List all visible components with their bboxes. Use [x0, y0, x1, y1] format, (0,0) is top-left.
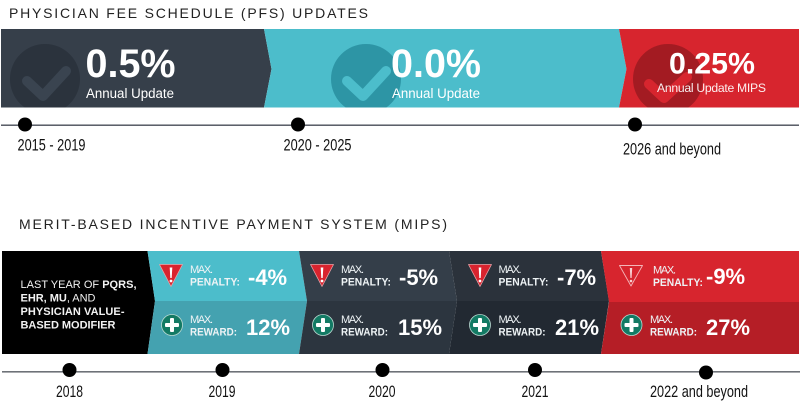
value: -5%: -5%: [399, 265, 438, 290]
label: max penalty: PENALTY:: [498, 276, 548, 288]
label: max penalty: PENALTY:: [341, 276, 391, 288]
title: MIPS: MERIT-BASED INCENTIVE PAYMENT SYSTEM (MIPS): [19, 216, 447, 232]
value: 12%: 12%: [246, 315, 290, 340]
value: 0.25%: 0.25%: [669, 48, 755, 80]
value: -9%: -9%: [706, 264, 745, 289]
timeline: MIPS: 2018: [56, 383, 83, 401]
label: max penalty: [498, 264, 548, 288]
timeline: MIPS: 2019: [208, 383, 236, 401]
value: 0.0%: 0.0%: [391, 42, 481, 86]
icon: check circle teal: [331, 44, 401, 114]
label: max reward: [650, 314, 697, 338]
timeline: PFS: 2026 and beyond: [623, 140, 721, 158]
value: 27%: 27%: [706, 315, 750, 340]
value: -7%: -7%: [557, 265, 596, 290]
icon: plus: [621, 314, 642, 336]
segment: 2018: [2, 251, 155, 354]
text: last year: LAST YEAR OF PQRS,: [20, 279, 136, 291]
timeline: PFS: [1, 118, 799, 158]
segment: 2020-2025: [264, 29, 626, 114]
label: max penalty: [341, 264, 391, 288]
segment: 2026 and beyond: [619, 29, 799, 114]
panel: MIPS banner: [2, 251, 799, 354]
text: last year: PHYSICIAN VALUE-: [20, 306, 125, 318]
label: annual update: Annual Update: [392, 86, 480, 101]
timeline: MIPS: 2022 and beyond: [650, 383, 748, 401]
segment: 2015-2019: [1, 29, 272, 114]
label: max penalty: MAX.: [653, 264, 676, 276]
label: max reward: [498, 314, 546, 338]
label: annual update MIPS: Annual Update MIPS: [657, 81, 766, 95]
segment: 2022 and beyond: [601, 251, 799, 354]
timeline: MIPS: 2021: [522, 383, 548, 401]
label: max reward: REWARD:: [650, 326, 697, 338]
icon: warning: [310, 264, 334, 286]
label: max reward: [190, 314, 237, 338]
label: max penalty: MAX.: [190, 264, 213, 276]
text: last year: BASED MODIFIER: [20, 320, 116, 332]
label: max penalty: [190, 264, 240, 288]
icon: warning: [468, 264, 492, 286]
value: -4%: -4%: [248, 265, 287, 290]
timeline: PFS: 2015 - 2019: [18, 136, 86, 154]
label: max reward: MAX.: [190, 314, 213, 326]
label: max reward: REWARD:: [498, 326, 546, 338]
icon: warning: [160, 264, 182, 286]
segment: 2020: [299, 251, 457, 354]
icon: plus: [312, 314, 334, 336]
label: max reward: MAX.: [498, 314, 522, 326]
icon: check circle red: [633, 44, 703, 114]
label: max penalty: MAX.: [498, 264, 522, 276]
text: last year: EHR, MU, AND: [20, 292, 96, 304]
segment: 2019: [148, 251, 307, 354]
value: 21%: 21%: [555, 315, 599, 340]
icon: plus: [470, 314, 490, 336]
value: 15%: 15%: [398, 315, 442, 340]
icon: warning outline: [620, 266, 642, 286]
label: max penalty: [653, 264, 703, 289]
title: physician fee schedule: PHYSICIAN FEE SCHEDULE (PFS) UPDATES: [9, 5, 368, 21]
label: max reward: MAX.: [341, 314, 364, 326]
label: max penalty: MAX.: [341, 264, 364, 276]
label: max reward: [341, 314, 388, 338]
label: max penalty: PENALTY:: [653, 277, 703, 289]
text: last year: [20, 279, 136, 332]
label: max reward: REWARD:: [190, 326, 237, 338]
segment: 2021: [449, 251, 609, 354]
timeline: MIPS: [2, 363, 800, 401]
label: annual update: Annual Update: [86, 86, 174, 101]
timeline: PFS: 2020 - 2025: [284, 136, 352, 154]
timeline: MIPS: 2020: [368, 383, 396, 401]
icon: plus: [162, 314, 182, 336]
label: max penalty: PENALTY:: [190, 276, 240, 288]
panel: PFS update banner: [1, 29, 799, 114]
label: max reward: MAX.: [650, 314, 673, 326]
icon: check circle dark: [10, 44, 80, 114]
label: max reward: REWARD:: [341, 326, 388, 338]
value: 0.5%: 0.5%: [86, 42, 176, 86]
